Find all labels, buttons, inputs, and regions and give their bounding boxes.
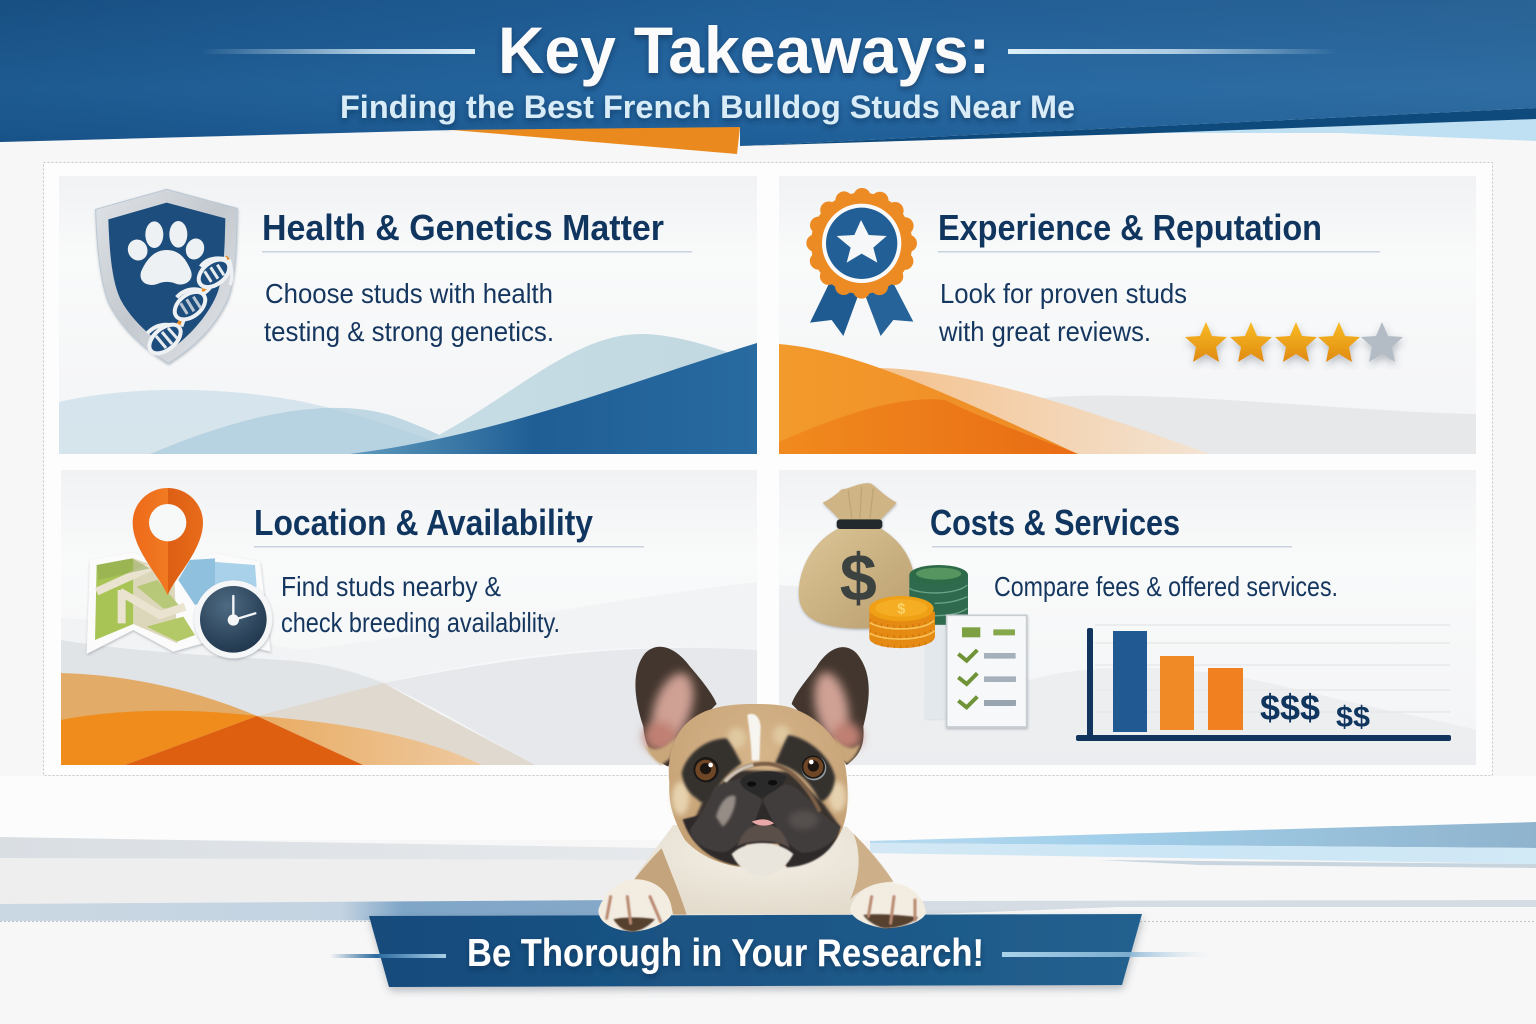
heading: Experience & Reputation bbox=[938, 207, 1322, 248]
banner text: Be Thorough in Your Research! bbox=[467, 932, 984, 975]
icon: map pin and clock bbox=[87, 488, 272, 658]
right paw bbox=[850, 883, 926, 928]
muzzle right lobe bbox=[763, 785, 840, 853]
closing banner bbox=[330, 914, 1212, 987]
icon: ribbon medal bbox=[810, 193, 913, 336]
blaze bbox=[747, 714, 761, 761]
heading: Costs & Services bbox=[930, 502, 1180, 543]
body text: Find studs nearby & bbox=[281, 571, 501, 602]
lower white area bbox=[0, 776, 1536, 840]
heading: Location & Availability bbox=[254, 502, 593, 543]
money bag: $ bbox=[840, 542, 877, 616]
icon: shield with paw and DNA bbox=[96, 189, 237, 363]
chin bbox=[732, 843, 793, 877]
nose bridge fold bbox=[727, 764, 820, 812]
muzzle left lobe bbox=[690, 778, 762, 852]
French bulldog illustration bbox=[598, 647, 926, 932]
tongue bbox=[752, 819, 774, 826]
dog body bbox=[633, 825, 893, 915]
panel: costs and services bbox=[779, 470, 1476, 765]
left paw bbox=[598, 879, 672, 932]
star rating bbox=[1185, 322, 1403, 362]
body text: Choose studs with health bbox=[265, 278, 553, 309]
panel: health and genetics bbox=[59, 176, 757, 454]
banner line right bbox=[1002, 952, 1212, 957]
right eye bbox=[802, 755, 826, 780]
checklist bbox=[925, 615, 1027, 727]
muzzle base bbox=[690, 770, 841, 847]
orange fold bbox=[452, 127, 740, 154]
dog head bbox=[669, 704, 848, 868]
title divider right bbox=[1008, 49, 1338, 54]
nose bbox=[740, 771, 787, 798]
lower jaw dark bbox=[683, 803, 840, 867]
face markings bbox=[672, 714, 846, 877]
panel: experience and reputation bbox=[779, 176, 1476, 454]
body text: with great reviews. bbox=[938, 316, 1151, 347]
panel: location and availability bbox=[61, 470, 757, 765]
body text: Compare fees & offered services. bbox=[994, 571, 1338, 602]
gold coins bbox=[869, 596, 935, 648]
right ear bbox=[792, 647, 869, 765]
money bag bbox=[799, 483, 915, 629]
DNA helix bbox=[144, 254, 234, 359]
price label high: $$$ bbox=[1260, 687, 1320, 728]
gold coins: $ bbox=[897, 601, 905, 617]
price label low: $$ bbox=[1336, 701, 1370, 734]
left ear bbox=[635, 647, 717, 767]
subtitle: Finding the Best French Bulldog Studs Near Me bbox=[340, 89, 1075, 125]
brow highlights bbox=[727, 728, 746, 749]
under-lip bbox=[737, 824, 790, 848]
header banner bbox=[0, 0, 1536, 154]
body text: check breeding availability. bbox=[281, 607, 560, 638]
bar chart bbox=[1076, 625, 1451, 741]
bottom decorative bands bbox=[0, 822, 1536, 922]
body text: Look for proven studs bbox=[940, 278, 1187, 309]
banner line left bbox=[330, 954, 446, 958]
title divider left bbox=[200, 49, 475, 54]
heading: Health & Genetics Matter bbox=[262, 207, 664, 248]
green coins bbox=[909, 565, 968, 633]
left eye bbox=[693, 757, 719, 782]
dotted frame bbox=[44, 162, 1492, 776]
title: Key Takeaways: bbox=[498, 13, 990, 87]
body text: testing & strong genetics. bbox=[264, 316, 554, 347]
icon: money bag, coins and checklist bbox=[799, 483, 1027, 727]
eye masks bbox=[682, 738, 742, 803]
